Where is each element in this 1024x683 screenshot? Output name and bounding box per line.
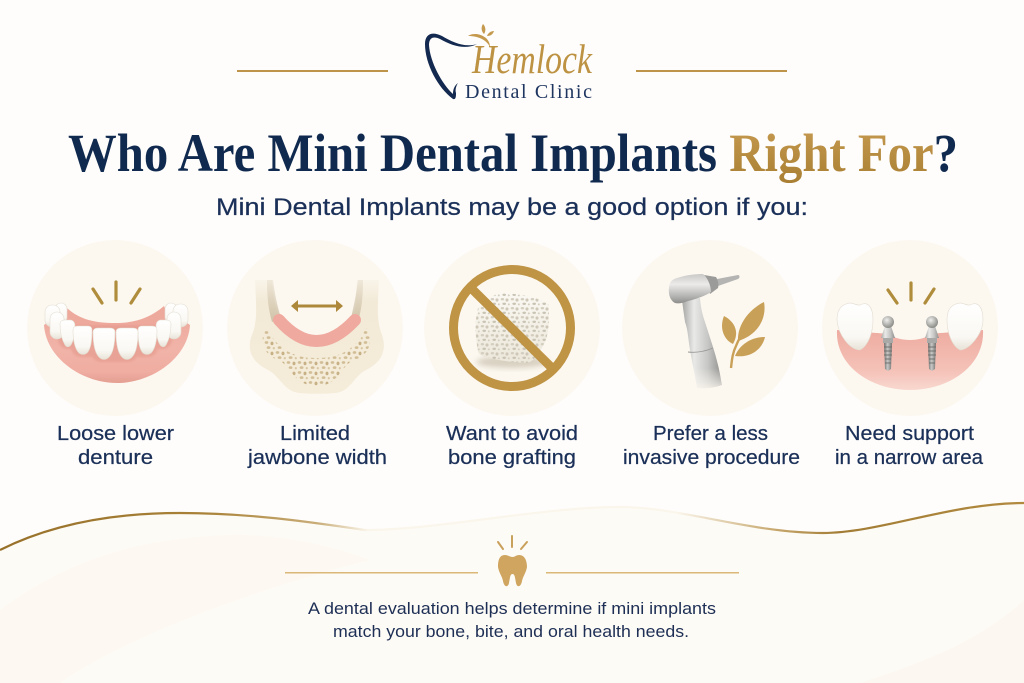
logo: left rule (237, 70, 388, 72)
label: denture (78, 446, 153, 469)
label: Prefer a less (653, 422, 768, 445)
label: Want to avoid (446, 422, 578, 445)
icon: looseness rays (93, 282, 140, 303)
logo: right rule (636, 70, 787, 72)
icon: dental handpiece (669, 274, 740, 390)
label: jawbone width (247, 446, 387, 469)
icon backdrop (27, 240, 203, 416)
panel: loose lower denture (27, 240, 203, 469)
logo: Dental Clinic wordmark: Dental Clinic (465, 81, 592, 103)
icon: denture (44, 282, 190, 383)
label: Need support (845, 422, 974, 445)
panel: avoid bone grafting (424, 240, 600, 469)
gold wave line (0, 503, 1024, 550)
label: bone grafting (448, 446, 576, 469)
subtitle: Mini Dental Implants may be a good option if you: (216, 194, 808, 221)
scalloped gum shadow (58, 325, 172, 362)
icon: gum with implants (837, 283, 983, 390)
icon: gold tooth (498, 555, 527, 586)
icon: gold tooth rays (498, 536, 527, 549)
icon: bone cube (476, 293, 549, 368)
icon: prohibition sign (454, 270, 570, 386)
logo: tooth outline (425, 34, 477, 99)
logo (237, 24, 787, 103)
footer divider with tooth icon (285, 536, 739, 586)
panel: limited jawbone width (227, 240, 403, 469)
title: Who Are Mini Dental Implants Right For? (68, 123, 958, 183)
icon backdrop (424, 240, 600, 416)
footer note: match your bone, bite, and oral health needs. (333, 623, 689, 641)
panel: narrow area support (822, 240, 998, 469)
icon: leaf sprig (722, 302, 765, 368)
icon: width arrow (291, 300, 343, 312)
bottom wave background (0, 503, 1024, 683)
label: in a narrow area (835, 446, 984, 469)
icon backdrop (227, 240, 403, 416)
icon: jawbone cross-section (250, 280, 384, 394)
panel: less invasive procedure (622, 240, 800, 469)
icon backdrop (622, 240, 798, 416)
logo: sprout (468, 24, 494, 47)
label: Loose lower (57, 422, 174, 445)
label: invasive procedure (623, 446, 800, 469)
logo: Hemlock wordmark: Hemlock (471, 36, 593, 82)
icon backdrop (822, 240, 998, 416)
icon: support rays (888, 283, 934, 303)
footer note: A dental evaluation helps determine if mini implants (308, 600, 716, 618)
label: Limited (280, 422, 350, 445)
